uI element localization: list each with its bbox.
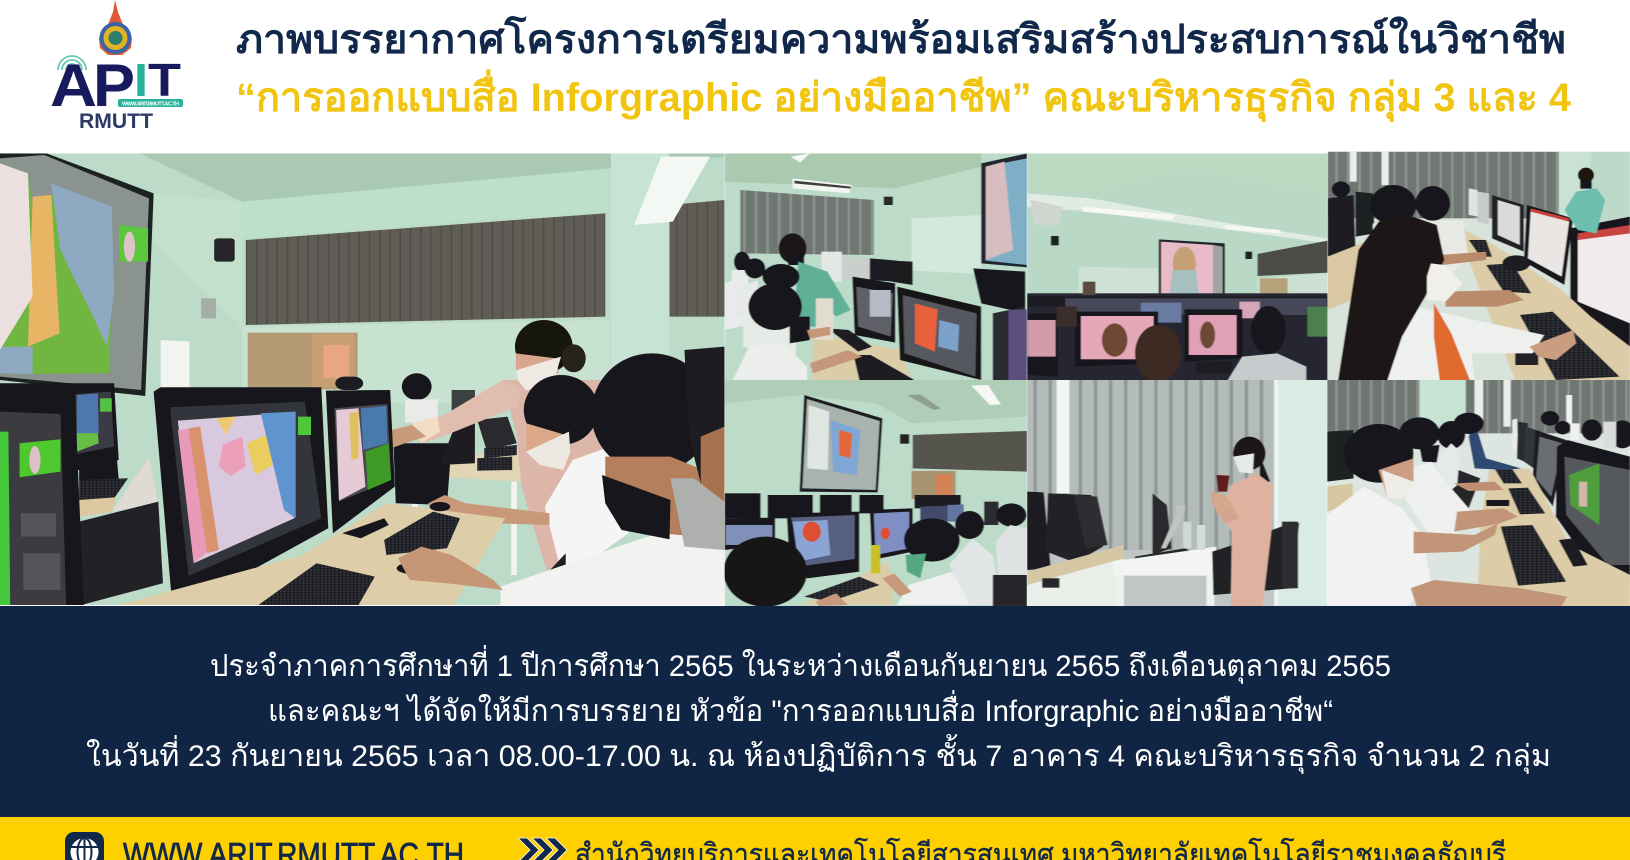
title line 1: ภาพบรรยากาศโครงการเตรียมความพร้อมเสริมสร้างประสบการณ์ในวิชาชีพ <box>236 16 1566 62</box>
icon: globe <box>65 832 104 860</box>
left foreground monitor <box>0 412 84 605</box>
logo wordmark: T <box>148 54 181 106</box>
logo wordmark <box>50 52 181 119</box>
logo wordmark: I <box>134 54 148 106</box>
photo: female lecturer speaking with microphone <box>1027 380 1327 606</box>
logo url tag: WWW.ARIT.RMUTT.AC.TH <box>122 102 179 108</box>
panel: yellow footer band <box>0 817 1630 860</box>
photo: students working in front of projector <box>723 380 1027 607</box>
icon: triple chevron arrow <box>518 838 567 860</box>
logo wordmark: A <box>50 52 97 119</box>
icon: signal arcs <box>58 56 86 70</box>
photo: classroom wide view with projected portrait <box>1027 153 1328 382</box>
description line 2: และคณะฯ ได้จัดให้มีการบรรยาย หัวข้อ "การออกแบบสื่อ Inforgraphic อย่างมืออาชีพ“ <box>268 690 1333 728</box>
panel: navy description band <box>0 606 1630 817</box>
title <box>236 16 1572 123</box>
photo: female student at computer row with teacher behind <box>1328 152 1630 380</box>
logo wordmark: P <box>93 52 135 119</box>
icon: university seal <box>99 0 132 55</box>
photo: instructor pointing at student's monitor <box>0 153 724 605</box>
description line 1: ประจำภาคการศึกษาที่ 1 ปีการศึกษา 2565 ในระหว่างเดือนกันยายน 2565 ถึงเดือนตุลาคม 2565 <box>210 645 1391 685</box>
photo: teacher among students with poster on screen <box>725 153 1027 380</box>
title line 2: “การออกแบบสื่อ Inforgraphic อย่างมืออาชีพ” คณะบริหารธุรกิจ กลุ่ม 3 และ 4 <box>236 69 1572 123</box>
logo RMUTT text: RMUTT <box>79 110 153 133</box>
description line 3: ในวันที่ 23 กันยายน 2565 เวลา 08.00-17.00 น. ณ ห้องปฏิบัติการ ชั้น 7 อาคาร 4 คณะบริหารธุรกิจ จำนวน 2 กลุ่ม <box>86 734 1551 775</box>
logo: ARIT RMUTT <box>50 0 183 133</box>
photo: row of students in white shirts at computers <box>1327 380 1630 606</box>
